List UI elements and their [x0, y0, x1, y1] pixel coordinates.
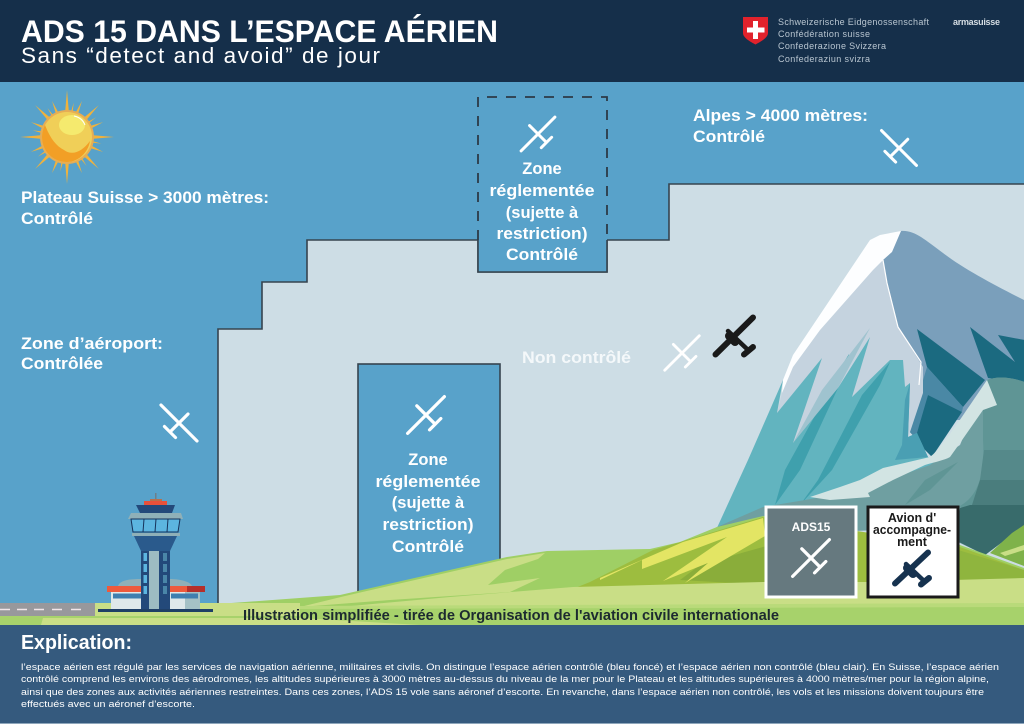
mountain right slate face — [883, 231, 1024, 420]
icon: legend escort plane — [895, 552, 929, 584]
mountain dark teal shadows — [917, 329, 985, 407]
foreground lower stripe — [0, 607, 1024, 625]
icon: ADS15 plane uncontrolled — [656, 327, 708, 379]
upper zone text — [490, 160, 594, 264]
mountain white snow cap — [782, 231, 901, 393]
Swiss Confederation wordmark: Confederaziun svizra — [778, 54, 870, 64]
lower zone text: Contrôlé — [392, 538, 464, 556]
lower zone text — [376, 451, 480, 556]
icon: ADS15 plane upper zone — [513, 109, 563, 159]
icon: black escort plane — [716, 318, 753, 354]
label: Non contrôlé: Non contrôlé — [522, 349, 631, 367]
label: Plateau Suisse — [21, 189, 269, 228]
icon: ADS15 plane lower zone — [398, 387, 454, 443]
mountain ridge highlight — [883, 260, 921, 385]
upper zone text: (sujette à — [506, 204, 579, 222]
hill olive slope — [570, 517, 1024, 590]
icon: Swiss shield — [743, 17, 768, 44]
legend: escort aircraft — [868, 507, 958, 597]
legend: escort aircraft: ment — [897, 535, 928, 549]
legend: ADS15 — [766, 507, 856, 597]
illustration: control tower and terminal — [98, 493, 213, 612]
panel: upper restricted zone — [478, 97, 607, 272]
lower zone text: réglementée — [376, 473, 480, 491]
front rock mass — [700, 377, 1024, 555]
hill light left slope — [300, 553, 545, 607]
panel: airspace scene background — [0, 82, 1024, 626]
legend: ADS15: ADS15 — [792, 520, 831, 534]
upper zone text: Contrôlé — [506, 246, 578, 264]
panel: lower restricted zone — [358, 364, 500, 604]
illustration: mountain — [700, 231, 1024, 555]
explanation paragraph — [21, 662, 999, 710]
icon: legend ADS15 plane — [783, 530, 839, 586]
label: Zone d'aéroport: Zone d’aéroport: — [21, 335, 163, 353]
subtitle: Sans “detect and avoid” de jour — [21, 43, 380, 68]
uncontrolled airspace stepped area — [218, 184, 1024, 610]
Swiss Confederation wordmark: Confédération suisse — [778, 29, 870, 39]
hill darker slopes — [680, 545, 770, 585]
title: ADS 15 DANS L’ESPACE AÉRIEN — [21, 13, 498, 49]
panel: explanation — [0, 625, 1024, 724]
Swiss Confederation wordmark: Schweizerische Eidgenossenschaft — [778, 17, 929, 27]
explanation paragraph: effectués avec un aéronef d’escorte. — [21, 699, 195, 710]
label: Plateau Suisse: Plateau Suisse > 3000 mètres: — [21, 189, 269, 207]
armasuisse label: armasuisse — [953, 17, 1000, 27]
explanation paragraph: contrôlé comprend les environs des aérodromes, les altitudes supérieures à 3000 mètres au-dessus du niveau de la mer pour le Plateau et les altitudes supérieures à 4000 mètres/mer pour la région alpine, — [21, 674, 989, 685]
label: Plateau Suisse: Contrôlé — [21, 210, 93, 228]
explanation heading: Explication: — [21, 632, 132, 654]
icon: ADS15 plane Alpes — [873, 122, 925, 174]
header band — [0, 0, 1024, 82]
legend: escort aircraft: Avion d' — [888, 511, 936, 525]
foreground meadow band — [0, 578, 1024, 612]
label: Zone d'aéroport: Contrôlée — [21, 355, 103, 373]
lower zone text: Zone — [408, 451, 448, 469]
lower zone text: (sujette à — [392, 494, 465, 512]
legend: escort aircraft: accompagne- — [873, 523, 951, 537]
icon: ADS15 plane airport zone — [152, 396, 206, 450]
upper zone text: Zone — [522, 160, 562, 178]
icon: sun — [20, 90, 114, 184]
label: Alpes — [693, 107, 868, 146]
illustration: green hills — [0, 516, 1024, 625]
label: Zone d'aéroport — [21, 335, 163, 373]
upper zone text: restriction) — [496, 225, 588, 243]
lower zone text: restriction) — [382, 516, 474, 534]
mountain grey-lavender face — [777, 260, 923, 480]
illustration: runway — [0, 603, 95, 616]
upper zone text: réglementée — [490, 182, 594, 200]
Swiss Confederation wordmark: Confederazione Svizzera — [778, 41, 886, 51]
hill far right bright patch — [990, 525, 1024, 566]
label: Alpes: Alpes > 4000 mètres: — [693, 107, 868, 125]
label: Alpes: Contrôlé — [693, 128, 765, 146]
explanation paragraph: l’espace aérien est régulé par les services de navigation aérienne, militaires et civils. On distingue l’espace aérien contrôlé (bleu foncé) et l’espace aérien non contrôlé (bleu clair). En Suisse, l’espace aérien — [21, 662, 999, 673]
hill yellow highlights — [600, 518, 765, 583]
front rock light ridge — [810, 380, 997, 500]
caption: Illustration simplifiée - tirée de Organisation de l'aviation civile internationale — [243, 608, 779, 624]
Swiss Confederation wordmark — [778, 17, 929, 64]
explanation paragraph: ainsi que des zones aux activités aériennes restreintes. Dans ces zones, l’ADS 15 vole sans aéronef d’escorte. En revanche, dans l’espace aérien non contrôlé, les vols et les missions doivent toujours être — [21, 687, 984, 698]
mountain teal lower slopes — [716, 337, 960, 530]
hill base — [0, 516, 1024, 625]
